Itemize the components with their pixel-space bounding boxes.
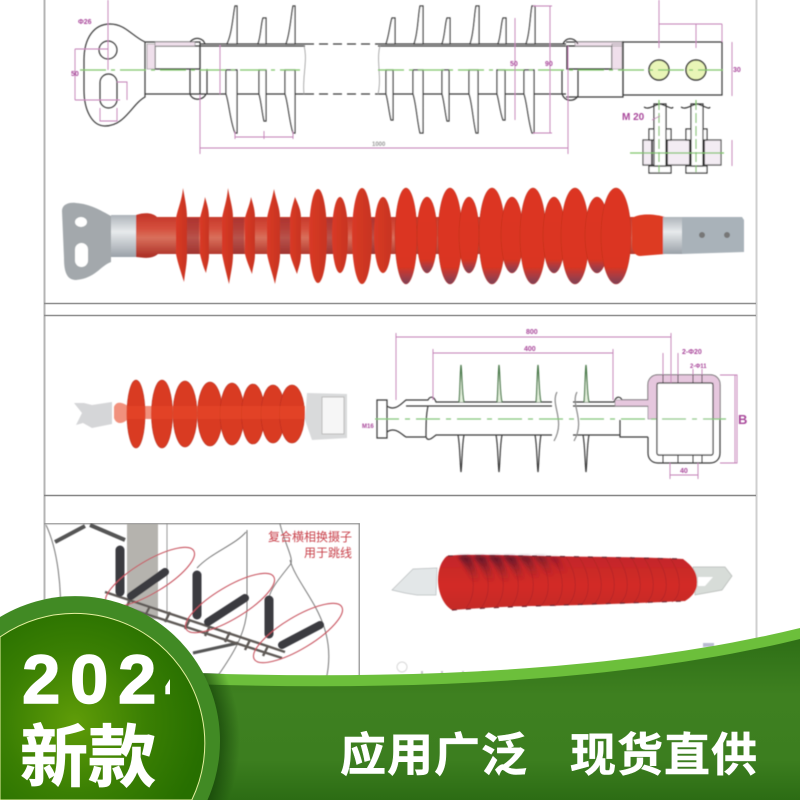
fitting hollow (698, 577, 713, 586)
tongue end fitting (562, 39, 722, 100)
photo: short red insulator with socket and clevis (74, 380, 347, 448)
ball end fitting (74, 402, 112, 428)
dimension lines (396, 333, 737, 479)
full sheds on the right (395, 188, 631, 284)
dimension labels: 50 (71, 71, 79, 78)
lower sheds (226, 70, 534, 133)
photo box outline (44, 524, 360, 680)
dimension labels: B (738, 412, 747, 427)
banner slogan 2: 现货直供 (570, 729, 758, 781)
dimension labels: 1000 (372, 142, 386, 148)
dark green band (190, 639, 800, 800)
dimension labels: 2-Φ20 (682, 349, 702, 356)
lattice crossarm (105, 592, 285, 658)
metal eye fitting (62, 203, 111, 280)
eye holes (75, 217, 88, 267)
break mark (554, 392, 579, 441)
dimension labels: 800 (526, 329, 538, 336)
lower sheds (458, 435, 589, 472)
dimension lines (75, 0, 732, 166)
banner slogan: 应用广泛 (340, 729, 528, 781)
centre line (375, 418, 726, 420)
metal tongue (682, 217, 744, 254)
red caption: 复合横相换摄子 (268, 529, 352, 544)
red rod (114, 403, 305, 423)
upper sheds (459, 365, 589, 402)
red caption: 用于跳线 (304, 546, 352, 560)
upper sheds (227, 6, 535, 44)
year badge: disc with ring (0, 596, 240, 800)
steel arms (55, 525, 238, 653)
red sheds (127, 380, 304, 448)
rod and ball end (377, 397, 648, 439)
dimension labels (71, 19, 741, 148)
frame lines of the specification sheet (44, 0, 756, 680)
photo: straight red insulator with dense sheds (392, 555, 732, 610)
technical drawing: insulator with rectangular yoke (362, 329, 747, 479)
metal socket fitting (305, 393, 347, 440)
metal fitting right (693, 567, 732, 595)
dimension labels: 90 (545, 61, 553, 68)
photo: long red composite insulator (62, 188, 744, 284)
red highlight ellipses (104, 546, 344, 664)
dimension labels: M 20 (622, 112, 645, 123)
photo: application on a transmission tower crossarm (44, 524, 360, 680)
dimension labels: Φ26 (78, 19, 92, 26)
eye plate end fitting (84, 24, 207, 126)
green bottom banner with light green curved edge (190, 628, 800, 800)
disc shadow (170, 673, 240, 800)
scalloped edges (448, 556, 685, 610)
inner disc (0, 613, 205, 800)
dimension labels: 2-Φ11 (690, 364, 707, 370)
pointed sheds on the left (176, 188, 392, 284)
dimension labels: 400 (524, 346, 536, 353)
dark rod segments behind sheds (187, 218, 377, 254)
outer disc (0, 596, 220, 800)
tongue bolt holes (699, 232, 730, 238)
dimension labels: 50 (510, 61, 518, 68)
hatched yoke section (615, 375, 720, 419)
centre lines (80, 70, 724, 172)
year text: 2024 (22, 641, 203, 718)
dimension labels: 40 (680, 468, 688, 475)
bolted section detail (643, 104, 721, 173)
dimension labels (362, 329, 747, 475)
tower pole (127, 524, 158, 619)
metal fitting left (392, 568, 437, 595)
rod outline with break (200, 44, 566, 94)
small cropped remnants above banner (397, 643, 714, 675)
red body (438, 555, 697, 610)
shed ridges (464, 556, 679, 608)
metal collar right (663, 217, 683, 254)
dimension labels: 30 (733, 67, 741, 74)
inner window (657, 383, 713, 455)
yoke holes (663, 375, 702, 463)
metal collar (111, 215, 138, 257)
wires (46, 524, 329, 680)
badge title: 新款 (20, 720, 156, 796)
red rod (136, 213, 640, 258)
insulators (120, 550, 320, 645)
dark shading at top-left (458, 556, 567, 584)
light green stripe (190, 628, 800, 800)
technical drawing: long-rod insulator with clevis and tongue fittings (71, 0, 741, 173)
yoke outline (648, 375, 720, 463)
red caption (268, 529, 352, 560)
red sleeve near tongue (632, 214, 665, 256)
dimension labels: M16 (362, 424, 374, 430)
